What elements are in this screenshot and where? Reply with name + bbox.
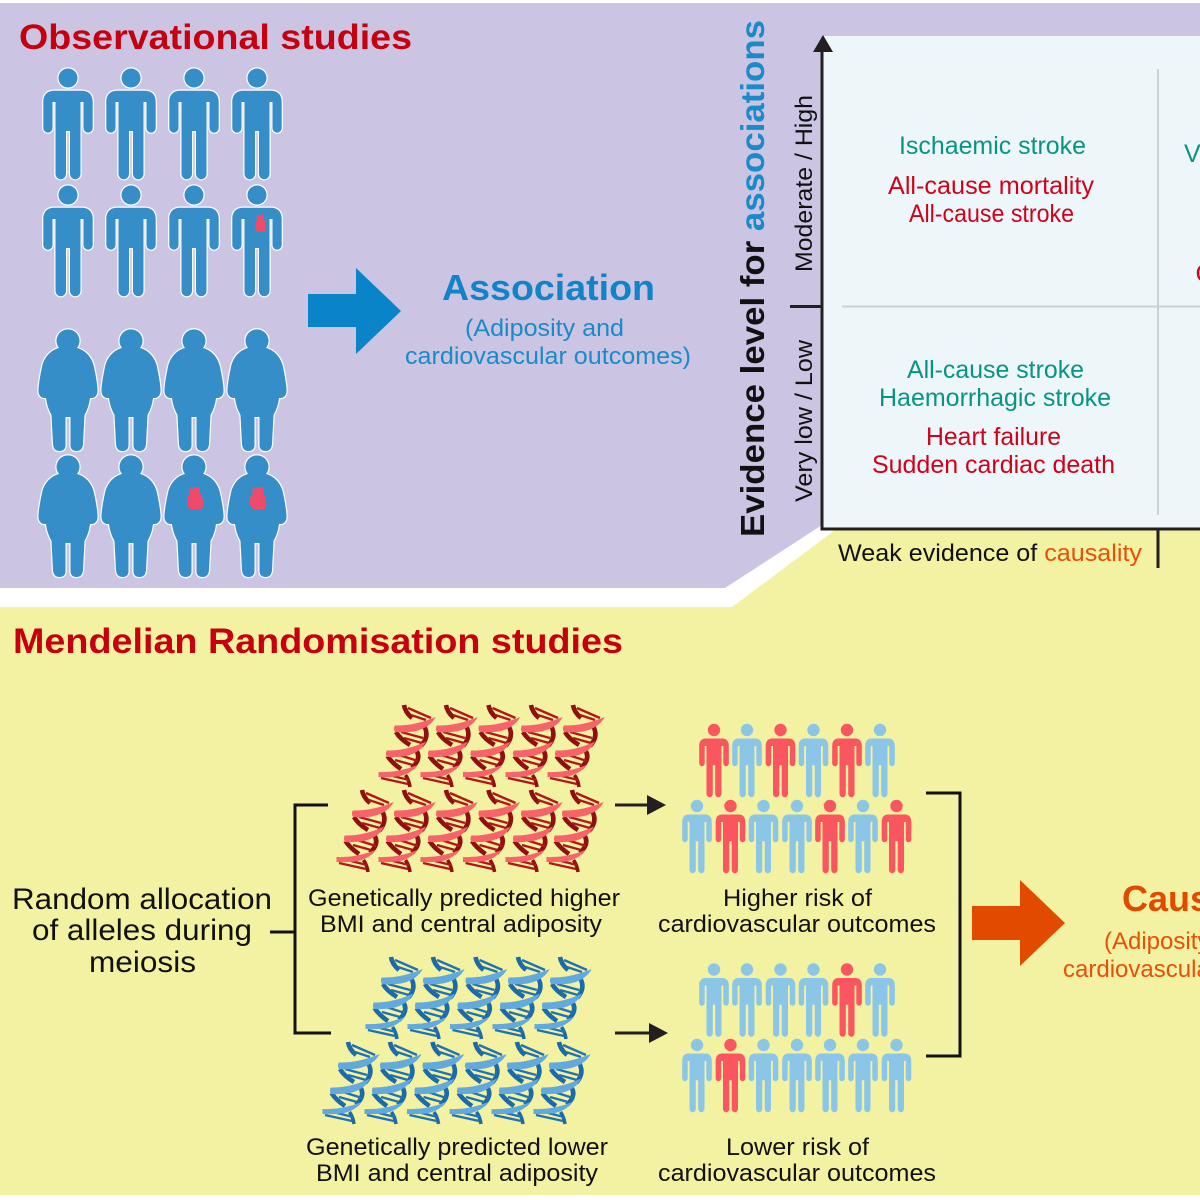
caption: higher BMI: BMI and central adiposity bbox=[320, 911, 602, 938]
icon group: lean people bbox=[43, 68, 282, 296]
y axis label: moderate / high: Moderate / High bbox=[791, 95, 818, 272]
caption: higher BMI bbox=[308, 885, 620, 938]
right bracket bbox=[926, 793, 960, 1056]
text block: random allocation bbox=[12, 883, 272, 979]
caption: higher BMI: Genetically predicted higher bbox=[308, 885, 620, 912]
caption: lower BMI: Genetically predicted lower bbox=[306, 1134, 608, 1161]
quadrant text: lower left: Haemorrhagic stroke bbox=[879, 384, 1111, 412]
text block: association: cardiovascular outcomes) bbox=[405, 343, 691, 370]
icon: hearts in people with obesity bbox=[187, 487, 266, 509]
chart axes bbox=[790, 35, 1200, 568]
arrow: to causality bbox=[972, 880, 1065, 966]
text block: association: (Adiposity and bbox=[465, 315, 624, 342]
icon group: people with obesity bbox=[38, 329, 287, 577]
caption: higher risk: cardiovascular outcomes bbox=[658, 911, 936, 938]
panel: evidence grid bbox=[823, 36, 1200, 529]
x axis label: weak evidence: Weak evidence of causality bbox=[838, 540, 1142, 567]
icon: heart in lean person bbox=[255, 214, 266, 232]
quadrant text: upper left bbox=[888, 132, 1094, 228]
text block: random allocation: Random allocation bbox=[12, 883, 272, 916]
caption: higher risk: Higher risk of bbox=[723, 885, 872, 912]
quadrant text: lower left: Sudden cardiac death bbox=[872, 451, 1115, 479]
grid lines bbox=[842, 69, 1200, 515]
panel: Mendelian randomisation background bbox=[0, 530, 1200, 1195]
text block: association: Association bbox=[442, 267, 655, 308]
quadrant text: upper left: All-cause mortality bbox=[888, 172, 1094, 200]
heading: observational studies: Observational studies bbox=[19, 18, 412, 57]
arrow: lower BMI to lower risk bbox=[615, 1023, 668, 1043]
text block: causality, cropped bbox=[1063, 878, 1200, 983]
text block: random allocation: meiosis bbox=[89, 946, 196, 979]
quadrant text: lower left bbox=[872, 356, 1115, 479]
icon group: red DNA, higher BMI bbox=[336, 705, 605, 872]
caption: lower BMI bbox=[306, 1134, 608, 1187]
caption: higher risk bbox=[658, 885, 936, 938]
text block: random allocation: of alleles during bbox=[32, 914, 252, 947]
y axis label: very low / low: Very low / Low bbox=[791, 339, 818, 502]
heading: Mendelian randomisation: Mendelian Randomisation studies bbox=[13, 622, 623, 661]
arrow: to association bbox=[308, 268, 401, 354]
caption: lower risk: Lower risk of bbox=[726, 1134, 869, 1161]
y axis title: Evidence level for associations bbox=[734, 20, 771, 537]
quadrant text: upper right, cropped bbox=[1184, 140, 1200, 288]
panel: observational studies background bbox=[0, 3, 1200, 588]
caption: lower risk: cardiovascular outcomes bbox=[658, 1160, 936, 1187]
quadrant text: lower left: Heart failure bbox=[926, 423, 1061, 451]
quadrant text: upper left: Ischaemic stroke bbox=[899, 132, 1086, 160]
icon group: blue DNA, lower BMI bbox=[322, 957, 592, 1124]
arrow: y axis head bbox=[813, 35, 833, 52]
left bracket bbox=[270, 805, 331, 1033]
quadrant text: upper left: All-cause stroke bbox=[909, 200, 1074, 228]
arrow: higher BMI to higher risk bbox=[615, 795, 666, 815]
icon group: higher risk population bbox=[682, 724, 911, 873]
caption: lower risk bbox=[658, 1134, 936, 1187]
quadrant text: lower left: All-cause stroke bbox=[907, 356, 1084, 384]
icon group: lower risk population bbox=[682, 963, 911, 1112]
text block: association bbox=[405, 267, 691, 370]
caption: lower BMI: BMI and central adiposity bbox=[316, 1160, 598, 1187]
